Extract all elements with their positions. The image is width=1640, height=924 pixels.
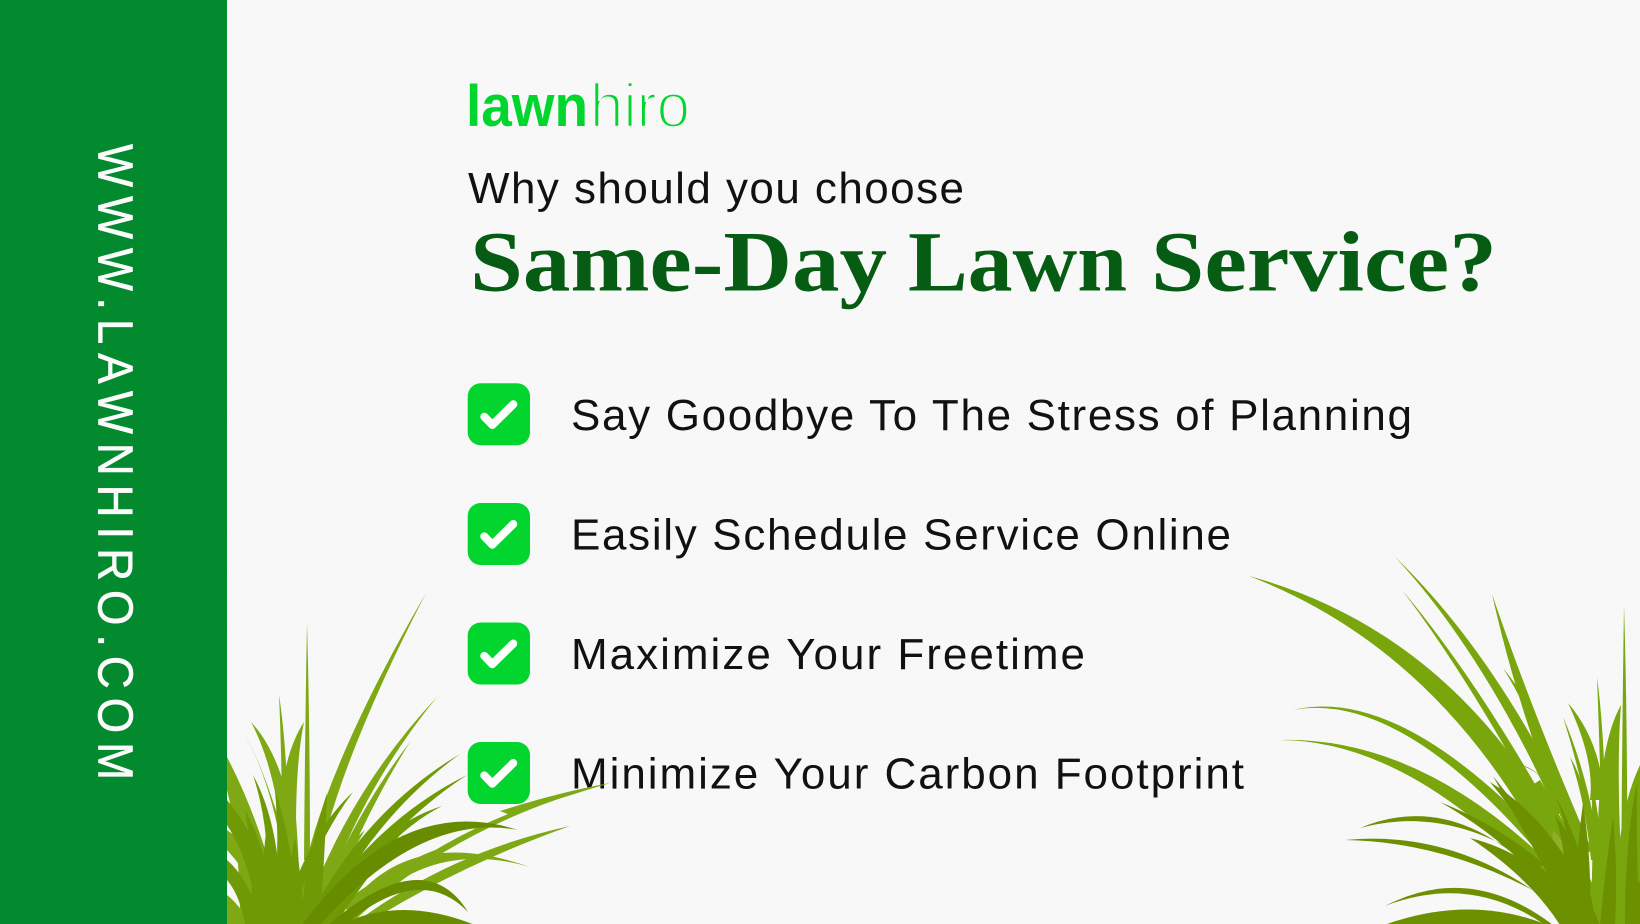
list item 4: Minimize Your Carbon Footprint bbox=[571, 750, 1244, 798]
title: Service? bbox=[1151, 214, 1497, 310]
list item 2: Easily Schedule Service Online bbox=[571, 510, 1231, 560]
subtitle: Why should you choose bbox=[468, 164, 964, 213]
grass blade over text and checkbox bbox=[500, 783, 610, 815]
icon: checkbox 4 bbox=[468, 742, 530, 804]
title: Same-Day bbox=[470, 214, 887, 310]
list item 3: Maximize Your Freetime bbox=[571, 630, 1085, 679]
grass: bottom left bbox=[227, 593, 610, 924]
icon: checkbox 2 bbox=[468, 503, 530, 565]
list item 1: Say Goodbye To The Stress of Planning bbox=[571, 391, 1412, 440]
title: Lawn bbox=[908, 214, 1127, 310]
logo: lawnhiro bbox=[466, 72, 690, 141]
icon: checkbox 3 bbox=[468, 622, 530, 684]
sidebar panel bbox=[0, 0, 227, 924]
grass: bottom right bbox=[1249, 557, 1640, 924]
logo: lawnhiro: lawn bbox=[466, 74, 588, 139]
sidebar website text: WWW.LAWNHIRO.COM bbox=[87, 144, 142, 780]
logo: lawnhiro: hiro bbox=[590, 72, 690, 141]
title bbox=[470, 214, 1497, 310]
icon: checkbox 1 bbox=[468, 383, 530, 445]
